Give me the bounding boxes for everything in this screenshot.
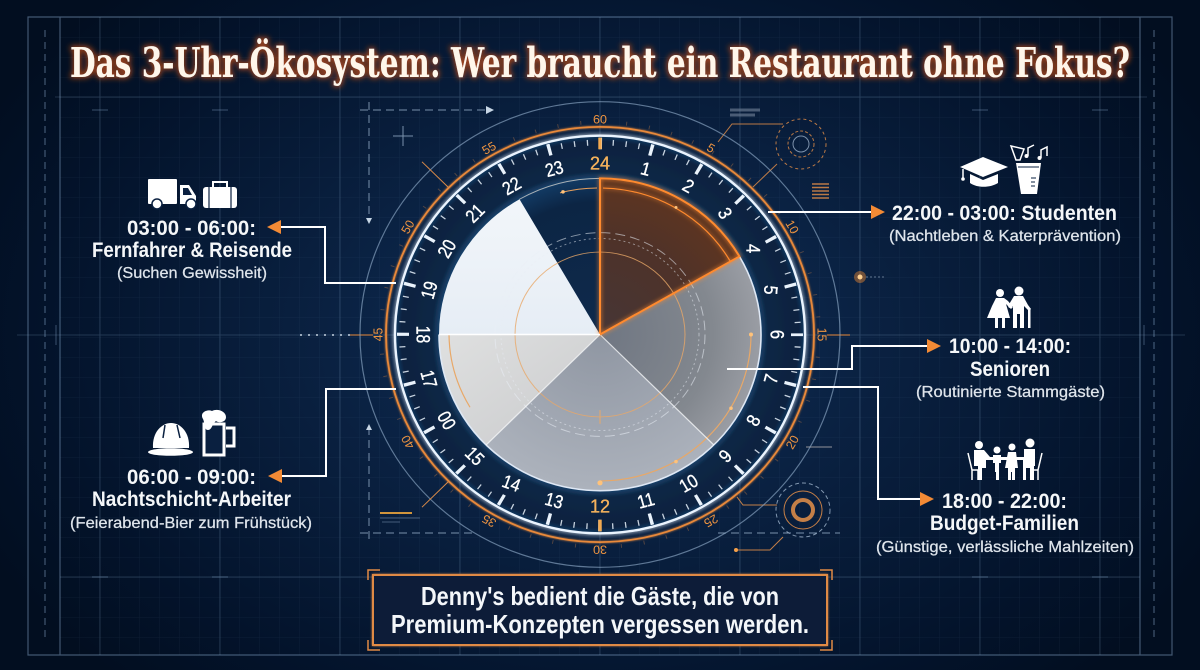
name: Budget-Familien [930, 512, 1079, 535]
icon: suitcase [203, 182, 237, 208]
hour numbers: 24 [590, 152, 610, 173]
outer thin ring [360, 102, 840, 567]
hour numbers: 18 [412, 326, 434, 343]
icon: cup with drink and notes [1011, 145, 1047, 194]
note: (Routinierte Stammgäste) [916, 384, 1105, 401]
note: (Suchen Gewissheit) [117, 265, 267, 282]
hour numbers: 7 [760, 372, 783, 386]
panel: seniors [916, 286, 1105, 401]
degree numbers: 45 [371, 328, 385, 341]
hour numbers: 1 [638, 158, 653, 180]
degree numbers: 30 [593, 543, 607, 556]
arrow: families [803, 387, 934, 506]
panel: budget families [876, 438, 1134, 556]
hour numbers: 20 [433, 236, 461, 262]
degree numbers: 40 [398, 433, 418, 451]
hour numbers: 14 [499, 470, 524, 496]
blueprint ornaments [300, 102, 850, 540]
hour numbers: 19 [416, 279, 442, 301]
wedge: 15-18 shift workers [439, 334, 600, 445]
degree numbers: 35 [479, 511, 499, 530]
hour numbers: 15 [461, 442, 489, 470]
hour numbers: 5 [760, 285, 782, 296]
degree numbers: 15 [815, 328, 829, 341]
time: 06:00 - 09:00: [127, 466, 256, 489]
hour numbers: 00 [433, 408, 461, 433]
time: 10:00 - 14:00: [949, 335, 1071, 358]
arrow: long-haul drivers [267, 220, 396, 283]
degree numbers: 5 [704, 141, 718, 156]
hour numbers: 8 [742, 411, 765, 430]
hour numbers: 23 [543, 156, 566, 181]
panel: long-haul drivers [92, 179, 292, 282]
wedge: 4-9 grey [600, 256, 761, 445]
degree numbers: 60 [593, 113, 607, 126]
wedge: 9-15 seniors and families [486, 334, 714, 491]
gear ornament: bottom right [734, 483, 830, 552]
note: (Feierabend-Bier zum Frühstück) [70, 515, 312, 532]
name: Fernfahrer & Reisende [92, 239, 292, 262]
note: (Günstige, verlässliche Mahlzeiten) [876, 539, 1134, 556]
hour numbers [412, 152, 787, 517]
hour numbers: 17 [416, 368, 442, 390]
degree numbers: 55 [480, 139, 499, 158]
dial band [395, 136, 805, 533]
arrow: seniors [727, 339, 941, 369]
time: 03:00 - 06:00: [127, 217, 256, 240]
degree numbers: 10 [782, 218, 802, 236]
clock dial [360, 102, 840, 567]
time and name: 22:00 - 03:00: Studenten [892, 202, 1117, 225]
hour numbers: 13 [543, 488, 566, 513]
panel: students [889, 145, 1121, 245]
hour numbers: 9 [714, 445, 736, 467]
wedge: 24-4 students highlighted [600, 178, 739, 334]
callout text line 1: Denny's bedient die Gäste, die von [421, 581, 779, 611]
hour numbers: 11 [635, 488, 657, 513]
orange ring [381, 122, 819, 547]
hour numbers: 12 [590, 495, 610, 517]
icon: truck [148, 179, 196, 209]
gear ornament: top right [718, 119, 829, 198]
icon: hard hat [148, 423, 193, 456]
arc markers [561, 190, 753, 485]
hour numbers: 4 [742, 244, 764, 253]
degree numbers [371, 113, 829, 556]
callout text line 2: Premium-Konzepten vergessen werden. [391, 609, 809, 639]
hour numbers: 3 [713, 204, 737, 222]
icon: graduation cap [960, 157, 1008, 187]
name: Senioren [970, 358, 1050, 381]
minute ticks [402, 138, 798, 531]
arrow: students [768, 205, 885, 219]
panel: shift workers [70, 410, 312, 532]
degree numbers: 20 [783, 433, 802, 452]
icon: elderly couple [987, 286, 1031, 328]
time: 18:00 - 22:00: [942, 490, 1067, 513]
wedge: 18-22 long-haul drivers [439, 199, 600, 334]
arrow: shift workers [268, 389, 396, 483]
name: Nachtschicht-Arbeiter [92, 488, 291, 511]
hour numbers: 10 [675, 470, 702, 497]
hour numbers: 2 [679, 175, 698, 197]
hour numbers: 21 [461, 199, 489, 227]
hour numbers: 6 [766, 330, 787, 339]
callout [368, 570, 832, 650]
highlight outline: students wedge [600, 178, 739, 334]
note: (Nachtleben & Katerprävention) [889, 228, 1121, 245]
hour numbers: 22 [498, 172, 525, 199]
inner radar arcs [439, 178, 761, 491]
icon: beer mug [202, 410, 234, 455]
white divider at hour 18 [439, 334, 600, 336]
degree numbers: 25 [701, 511, 720, 530]
icon: family at table [968, 438, 1042, 480]
degree numbers: 50 [398, 218, 418, 236]
glow dot [854, 271, 884, 283]
wedge: empty 22-24 [520, 178, 600, 334]
